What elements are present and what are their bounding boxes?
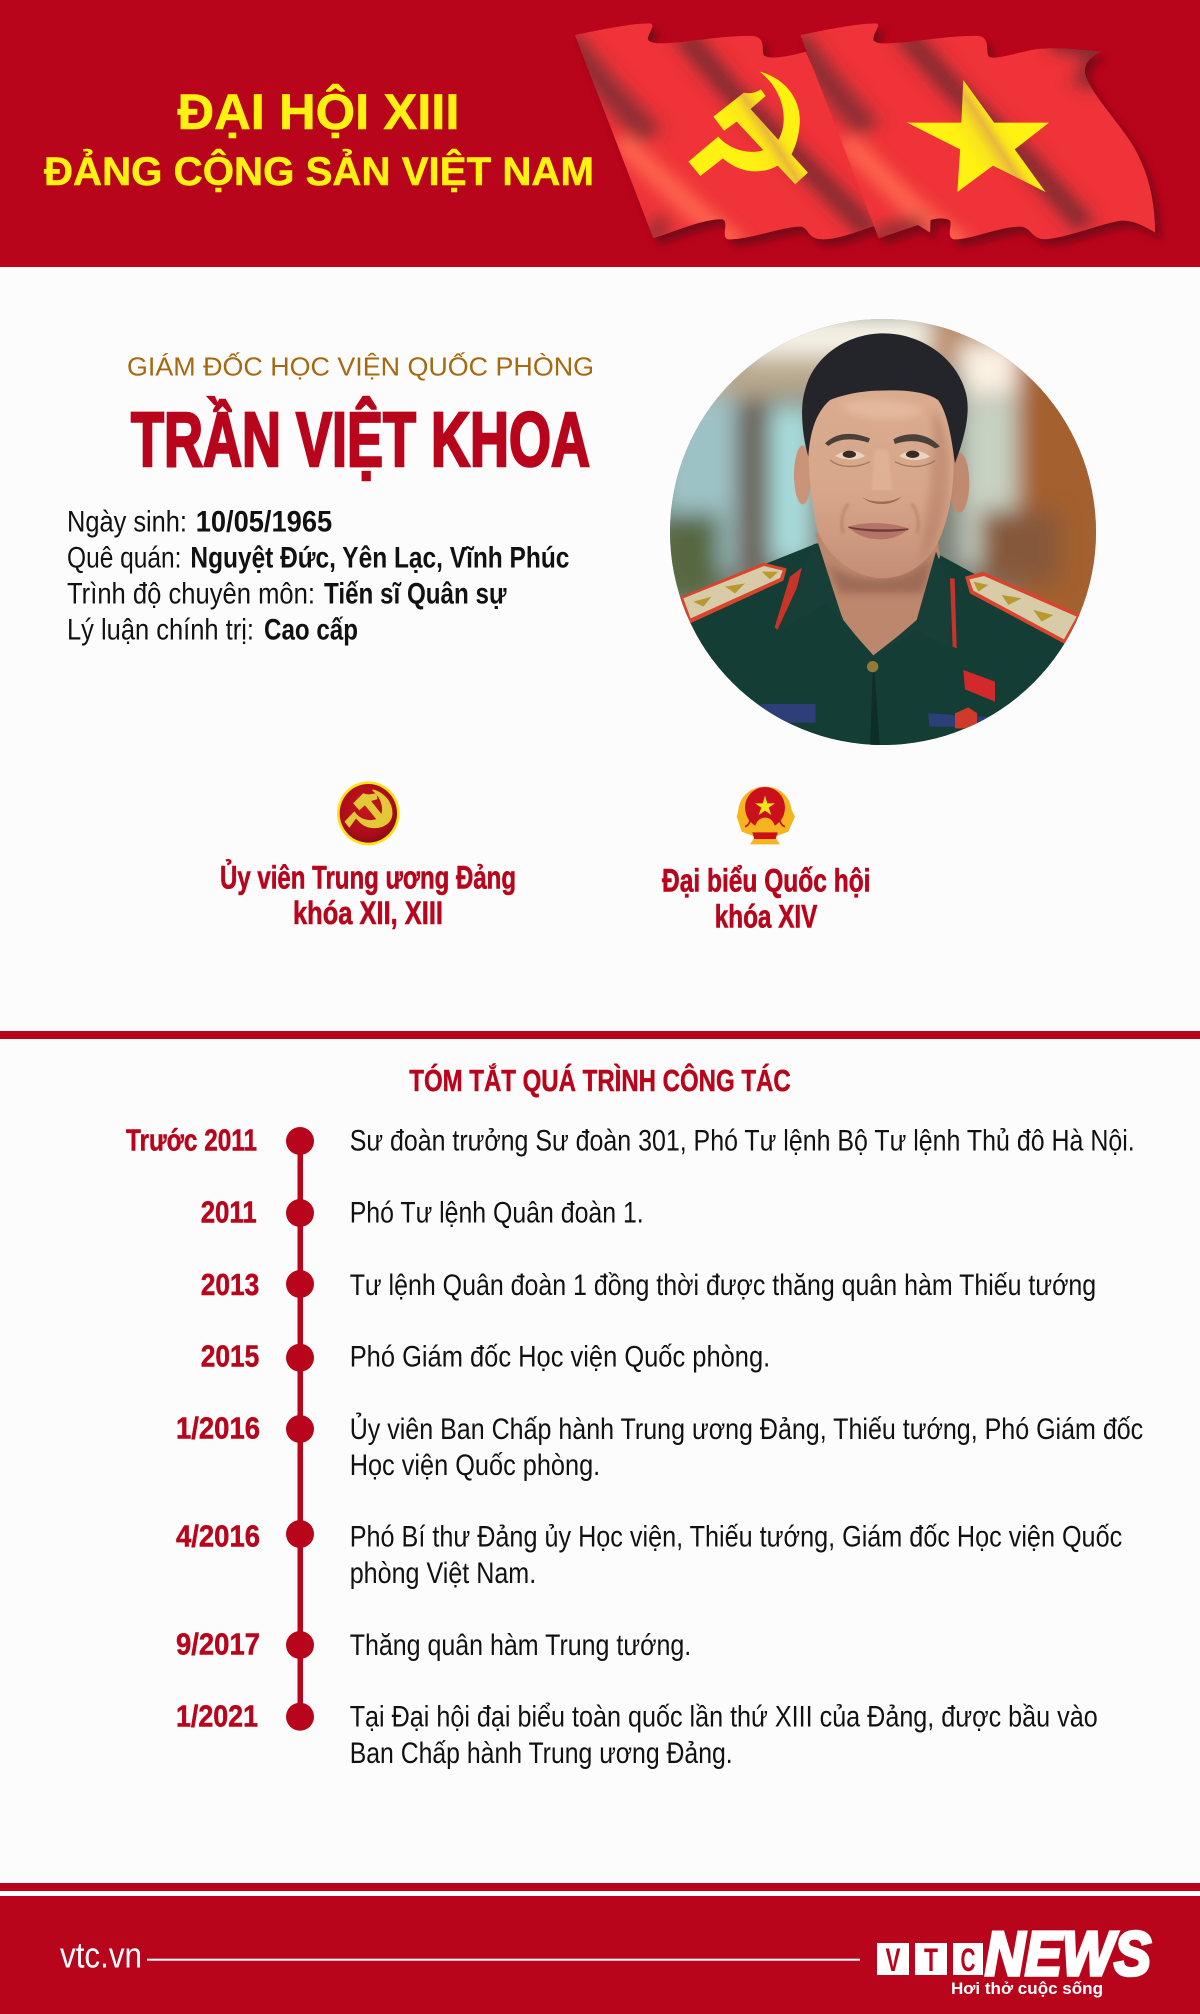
collar <box>814 544 860 640</box>
entry: 4/2016: phòng Việt Nam. <box>350 1557 536 1590</box>
left epaulette <box>679 563 787 623</box>
collar tabs <box>775 568 802 630</box>
personal details: Lý luận chính trị: <box>67 613 254 646</box>
entry: 1/2016: 1/2016 <box>176 1410 260 1445</box>
membership: national assembly <box>662 787 870 935</box>
entry: 2011: Phó Tư lệnh Quân đoàn 1. <box>350 1197 644 1230</box>
logo: VTC News: T <box>924 1942 938 1978</box>
personal details: 10/05/1965 <box>196 506 332 539</box>
entry: 1/2016 <box>176 1410 1143 1482</box>
person name: TRẦN VIỆT KHOA <box>131 396 590 483</box>
header banner <box>0 0 1200 267</box>
section divider <box>0 1031 1200 1039</box>
membership: party central committee: khóa XII, XIII <box>293 895 443 931</box>
flags illustration <box>564 23 1161 250</box>
label: Đại biểu Quốc hội <box>662 863 870 899</box>
personal details: Cao cấp <box>264 613 358 646</box>
entry: 1/2021: Ban Chấp hành Trung ương Đảng. <box>350 1737 733 1770</box>
icon: hammer and sickle <box>689 72 808 184</box>
membership: party central committee <box>220 781 516 931</box>
logo: VTC News: C <box>960 1942 976 1978</box>
footer <box>0 1883 1200 2014</box>
title line 1: ĐẠI HỘI XIII <box>178 83 460 140</box>
entry: 2011: 2011 <box>201 1194 257 1230</box>
personal details: Ngày sinh: <box>67 506 187 539</box>
logo: VTC News: NEWS <box>985 1920 1151 1989</box>
site url: vtc.vn <box>60 1934 142 1975</box>
personal details: Trình độ chuyên môn: <box>67 577 315 610</box>
ears <box>794 446 811 504</box>
hair <box>802 333 968 463</box>
entry: 1/2021: 1/2021 <box>176 1699 258 1734</box>
entry: 2015 <box>201 1339 770 1374</box>
logo: VTC News <box>877 1920 1151 1998</box>
icon: gold star <box>907 80 1049 192</box>
entry: Trước 2011 <box>126 1123 1135 1158</box>
neck <box>815 533 940 655</box>
eyes <box>835 451 865 459</box>
entry: 9/2017: Thăng quân hàm Trung tướng. <box>350 1629 691 1662</box>
section heading: TÓM TẮT QUÁ TRÌNH CÔNG TÁC <box>409 1062 791 1098</box>
entry: 4/2016 <box>176 1519 1122 1590</box>
medal ribbon <box>955 707 977 728</box>
logo: VTC News: Hơi thở cuộc sống <box>951 1979 1103 1998</box>
nose <box>862 497 902 504</box>
portrait photo <box>670 319 1096 745</box>
entry: 4/2016: 4/2016 <box>176 1519 260 1554</box>
personal details: Tiến sĩ Quân sự <box>324 577 507 610</box>
entry: 2015: 2015 <box>201 1339 259 1374</box>
face <box>808 380 954 578</box>
entry: 2011 <box>201 1194 644 1230</box>
personal details: Nguyệt Đức, Yên Lạc, Vĩnh Phúc <box>190 542 569 575</box>
entry: 9/2017: 9/2017 <box>176 1626 260 1661</box>
title line 2: ĐẢNG CỘNG SẢN VIỆT NAM <box>44 149 594 194</box>
entry: 1/2021 <box>176 1699 1098 1770</box>
eyebrows <box>825 434 870 446</box>
button <box>867 661 878 672</box>
personal details: Quê quán: <box>67 542 182 575</box>
uniform <box>673 543 1083 748</box>
position title: GIÁM ĐỐC HỌC VIỆN QUỐC PHÒNG <box>127 352 594 382</box>
flag pin <box>963 670 995 702</box>
personal details <box>67 506 569 646</box>
entry: 9/2017 <box>176 1626 691 1662</box>
lips <box>848 523 908 539</box>
name tag <box>760 704 816 723</box>
entry: 1/2016: Học viện Quốc phòng. <box>350 1449 600 1482</box>
entry: 2015: Phó Giám đốc Học viện Quốc phòng. <box>350 1341 770 1374</box>
entry: 2013: 2013 <box>201 1267 259 1302</box>
icon: state emblem <box>737 787 795 844</box>
career timeline <box>126 1123 1143 1770</box>
right epaulette <box>965 572 1080 644</box>
logo: VTC News: V <box>886 1942 901 1978</box>
icon: party emblem <box>337 781 400 845</box>
membership: national assembly: khóa XIV <box>715 899 818 935</box>
label: Ủy viên Trung ương Đảng <box>220 859 516 895</box>
entry: Trước 2011: Trước 2011 <box>126 1123 257 1158</box>
